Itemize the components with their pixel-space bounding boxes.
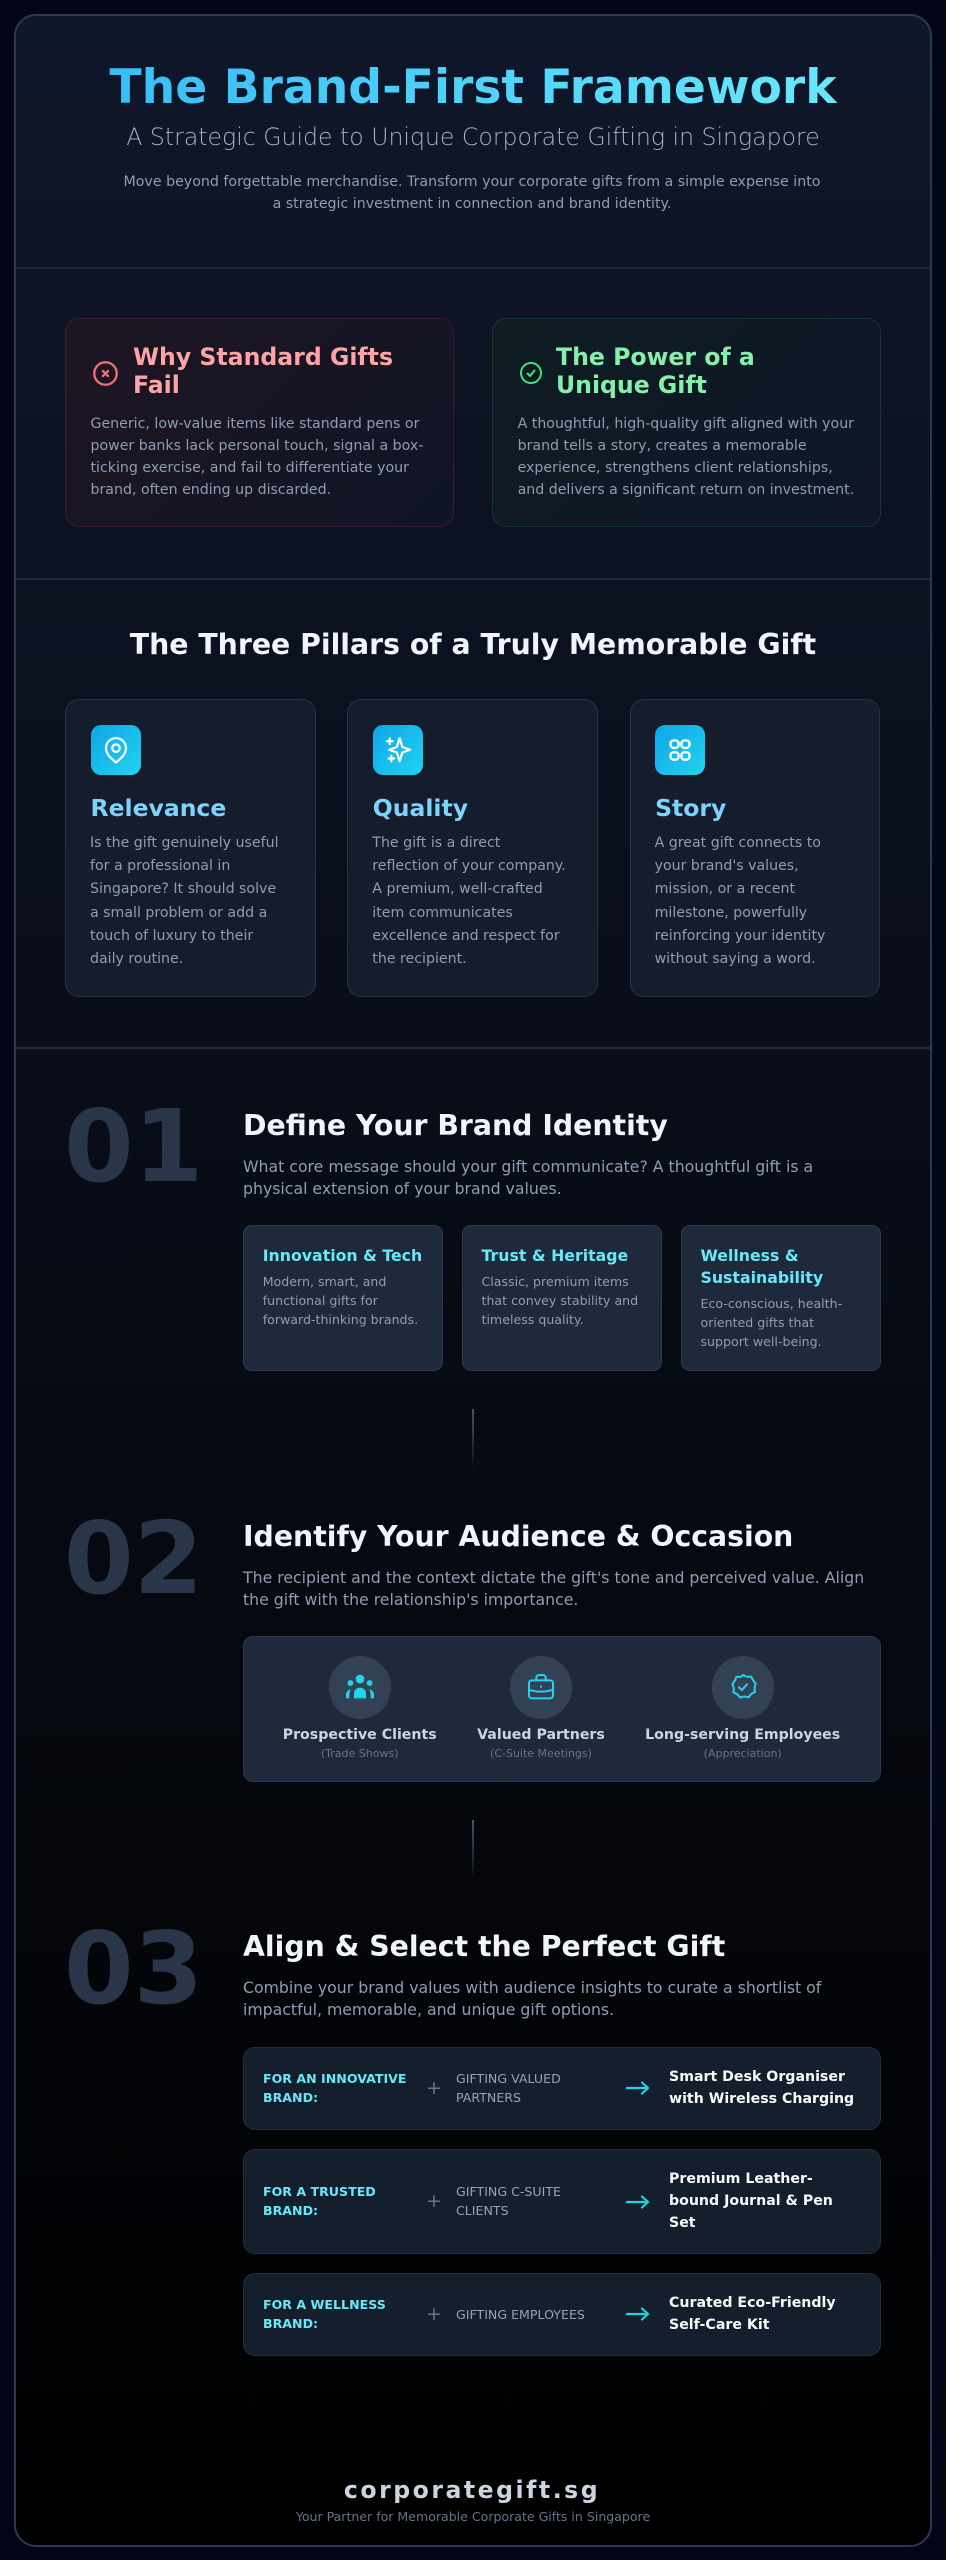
row: wellness brand: Curated Eco-Friendly [669, 2295, 836, 2311]
card: trust and heritage: timeless quality. [482, 1312, 584, 1327]
pillar text: Singapore? It should solve [90, 881, 276, 897]
heading: three pillars: The Three Pillars of a Truly Memorable Gift [130, 628, 816, 661]
card: wellness and sustainability: Eco-conscious, health- [700, 1296, 842, 1311]
step description: What core message should your gift communicate? A thoughtful gift is a [243, 1157, 813, 1176]
body text [518, 416, 854, 498]
audience: valued partners [477, 1656, 605, 1760]
heading [556, 343, 755, 399]
pillar text: your brand's values, [655, 858, 799, 874]
step description: The recipient and the context dictate the gift's tone and perceived value. Align [243, 1568, 864, 1587]
header [109, 60, 837, 212]
step 2 [64, 1500, 881, 1782]
body text: Generic, low-value items like standard pens or [90, 416, 419, 432]
card: innovation and tech: Modern, smart, and [263, 1274, 386, 1289]
body text: power banks lack personal touch, signal a box- [90, 438, 423, 454]
step description: impactful, memorable, and unique gift options. [243, 2000, 614, 2019]
audience: long-serving employees [645, 1656, 840, 1760]
card: wellness and sustainability: oriented gifts that [700, 1315, 814, 1330]
pillar text: A great gift connects to [655, 835, 821, 851]
heading: Why Standard Gifts [133, 343, 393, 371]
row: trusted brand: CLIENTS [456, 2203, 509, 2218]
intro paragraph [124, 174, 820, 212]
icon: users [328, 1656, 391, 1719]
heading [133, 343, 393, 399]
arrow [626, 2307, 650, 2321]
step description: physical extension of your brand values. [243, 1179, 562, 1198]
audience: long-serving employees: (Appreciation) [704, 1747, 782, 1760]
pillar text [654, 835, 825, 967]
pillar text: a small problem or add a [90, 905, 267, 921]
icon: sparkles [373, 725, 423, 775]
row: trusted brand: FOR A TRUSTED [263, 2184, 376, 2199]
row: innovative brand: GIFTING VALUED [456, 2071, 561, 2086]
pillar: relevance [65, 699, 316, 997]
pillar text: touch of luxury to their [90, 928, 253, 944]
row: innovative brand [243, 2047, 881, 2130]
step description [242, 1568, 864, 1609]
panel: why standard gifts fail [65, 318, 454, 527]
body text: experience, strengthens client relationships, [518, 460, 833, 476]
row: innovative brand: BRAND: [263, 2090, 318, 2105]
audience: valued partners: (C-Suite Meetings) [490, 1747, 592, 1760]
row: wellness brand: + [426, 2303, 442, 2325]
card: trust and heritage: Trust & Heritage [482, 1246, 628, 1265]
row: trusted brand: GIFTING C-SUITE [456, 2184, 561, 2199]
row: trusted brand: Premium Leather- [669, 2171, 813, 2187]
heading: Fail [133, 371, 180, 399]
pillar: quality [347, 699, 598, 997]
icon: map pin [91, 725, 141, 775]
pillar text: The gift is a direct [372, 835, 500, 851]
connector 1 [472, 1409, 474, 1470]
pillar text: mission, or a recent [655, 881, 795, 897]
step number: 02 [64, 1500, 203, 1617]
row: innovative brand: PARTNERS [456, 2090, 521, 2105]
pillar text: reinforcing your identity [655, 928, 825, 944]
icon: four rounded squares [655, 725, 705, 775]
body text: brand, often ending up discarded. [90, 482, 331, 498]
card: wellness and sustainability [680, 1225, 880, 1371]
audience: long-serving employees: Long-serving Employees [645, 1727, 840, 1743]
pillar text [372, 835, 566, 967]
body text: A thoughtful, high-quality gift aligned with your [518, 416, 854, 432]
row: trusted brand: BRAND: [263, 2203, 318, 2218]
pillar text: item communicates [372, 905, 513, 921]
card: trust and heritage [462, 1225, 662, 1371]
heading: Unique Gift [556, 371, 707, 399]
panel: the power of a unique gift [492, 318, 881, 527]
audience: prospective clients: (Trade Shows) [321, 1747, 398, 1760]
card: innovation and tech [243, 1225, 443, 1371]
step description: Combine your brand values with audience insights to curate a shortlist of [243, 1978, 821, 1997]
intro paragraph: a strategic investment in connection and brand identity. [273, 196, 671, 212]
card: innovation and tech: forward-thinking brands. [263, 1312, 418, 1327]
pillar text: for a professional in [90, 858, 230, 874]
step description: the gift with the relationship's importance. [243, 1590, 578, 1609]
icon: briefcase [510, 1656, 572, 1719]
brand name: corporategift.sg [344, 2476, 600, 2504]
step number: 01 [64, 1088, 203, 1205]
pillar text: Is the gift genuinely useful [90, 835, 278, 851]
connector 2 [472, 1820, 474, 1881]
pillar text: reflection of your company. [372, 858, 566, 874]
icon: badge check [712, 1656, 774, 1719]
pillar text: the recipient. [372, 951, 467, 967]
footer [296, 2476, 650, 2524]
card: innovation and tech: Innovation & Tech [263, 1246, 422, 1265]
arrow [626, 2081, 650, 2095]
row: innovative brand: + [426, 2077, 442, 2099]
row: innovative brand: FOR AN INNOVATIVE [263, 2071, 406, 2086]
pillar title: Quality [373, 794, 468, 822]
pillar title: Relevance [90, 794, 226, 822]
row: trusted brand: bound Journal & Pen [669, 2193, 833, 2209]
row: wellness brand: FOR A WELLNESS [263, 2297, 386, 2312]
pillar text: daily routine. [90, 951, 183, 967]
audience: prospective clients [283, 1656, 437, 1760]
intro paragraph: Move beyond forgettable merchandise. Transform your corporate gifts from a simple expense into [124, 174, 820, 190]
arrow [626, 2195, 650, 2209]
body text: and delivers a significant return on investment. [518, 482, 854, 498]
card: innovation and tech: functional gifts for [263, 1293, 378, 1308]
audience: prospective clients: Prospective Clients [283, 1727, 437, 1743]
card: wellness and sustainability: Wellness & [700, 1246, 799, 1265]
icon: check circle [520, 362, 542, 384]
pillar text: without saying a word. [655, 951, 816, 967]
pillar text: A premium, well-crafted [372, 881, 543, 897]
row: wellness brand: GIFTING EMPLOYEES [456, 2307, 585, 2322]
pillar card background [65, 699, 316, 997]
audience: valued partners: Valued Partners [477, 1727, 605, 1743]
pillar card background [347, 699, 598, 997]
row: wellness brand [243, 2273, 881, 2356]
icon: x circle [93, 361, 118, 386]
step description [243, 1157, 813, 1198]
card: wellness and sustainability: Sustainability [700, 1268, 823, 1287]
row: trusted brand: + [426, 2190, 442, 2212]
pillar text: milestone, powerfully [655, 905, 807, 921]
pillar card background [630, 699, 880, 997]
row: wellness brand: Self-Care Kit [669, 2317, 769, 2333]
body text: ticking exercise, and fail to differentiate your [90, 460, 409, 476]
body text [90, 416, 423, 498]
step heading: Identify Your Audience & Occasion [243, 1520, 793, 1553]
audience panel [243, 1636, 881, 1782]
pillar title: Story [655, 794, 726, 822]
step number: 03 [64, 1910, 203, 2027]
step heading: Define Your Brand Identity [243, 1109, 668, 1142]
tagline: Your Partner for Memorable Corporate Gifts in Singapore [296, 2509, 650, 2524]
row: trusted brand [243, 2149, 881, 2254]
heading: The Power of a [556, 343, 755, 371]
card: trust and heritage: Classic, premium items [482, 1274, 629, 1289]
card: trust and heritage: that convey stability and [482, 1293, 638, 1308]
body text: brand tells a story, creates a memorable [518, 438, 807, 454]
subtitle: A Strategic Guide to Unique Corporate Gifting in Singapore [126, 123, 820, 151]
card: wellness and sustainability: support well-being. [700, 1334, 822, 1349]
step heading: Align & Select the Perfect Gift [243, 1930, 725, 1963]
step description [243, 1978, 822, 2019]
title: The Brand-First Framework [109, 60, 837, 115]
row: innovative brand: Smart Desk Organiser [669, 2069, 845, 2085]
pillar text: excellence and respect for [372, 928, 560, 944]
row: innovative brand: with Wireless Charging [669, 2091, 854, 2107]
row: wellness brand: BRAND: [263, 2316, 318, 2331]
row: trusted brand: Set [669, 2215, 696, 2231]
pillar: story [630, 699, 880, 997]
pillar text [90, 835, 278, 967]
step 1 [64, 1088, 881, 1371]
